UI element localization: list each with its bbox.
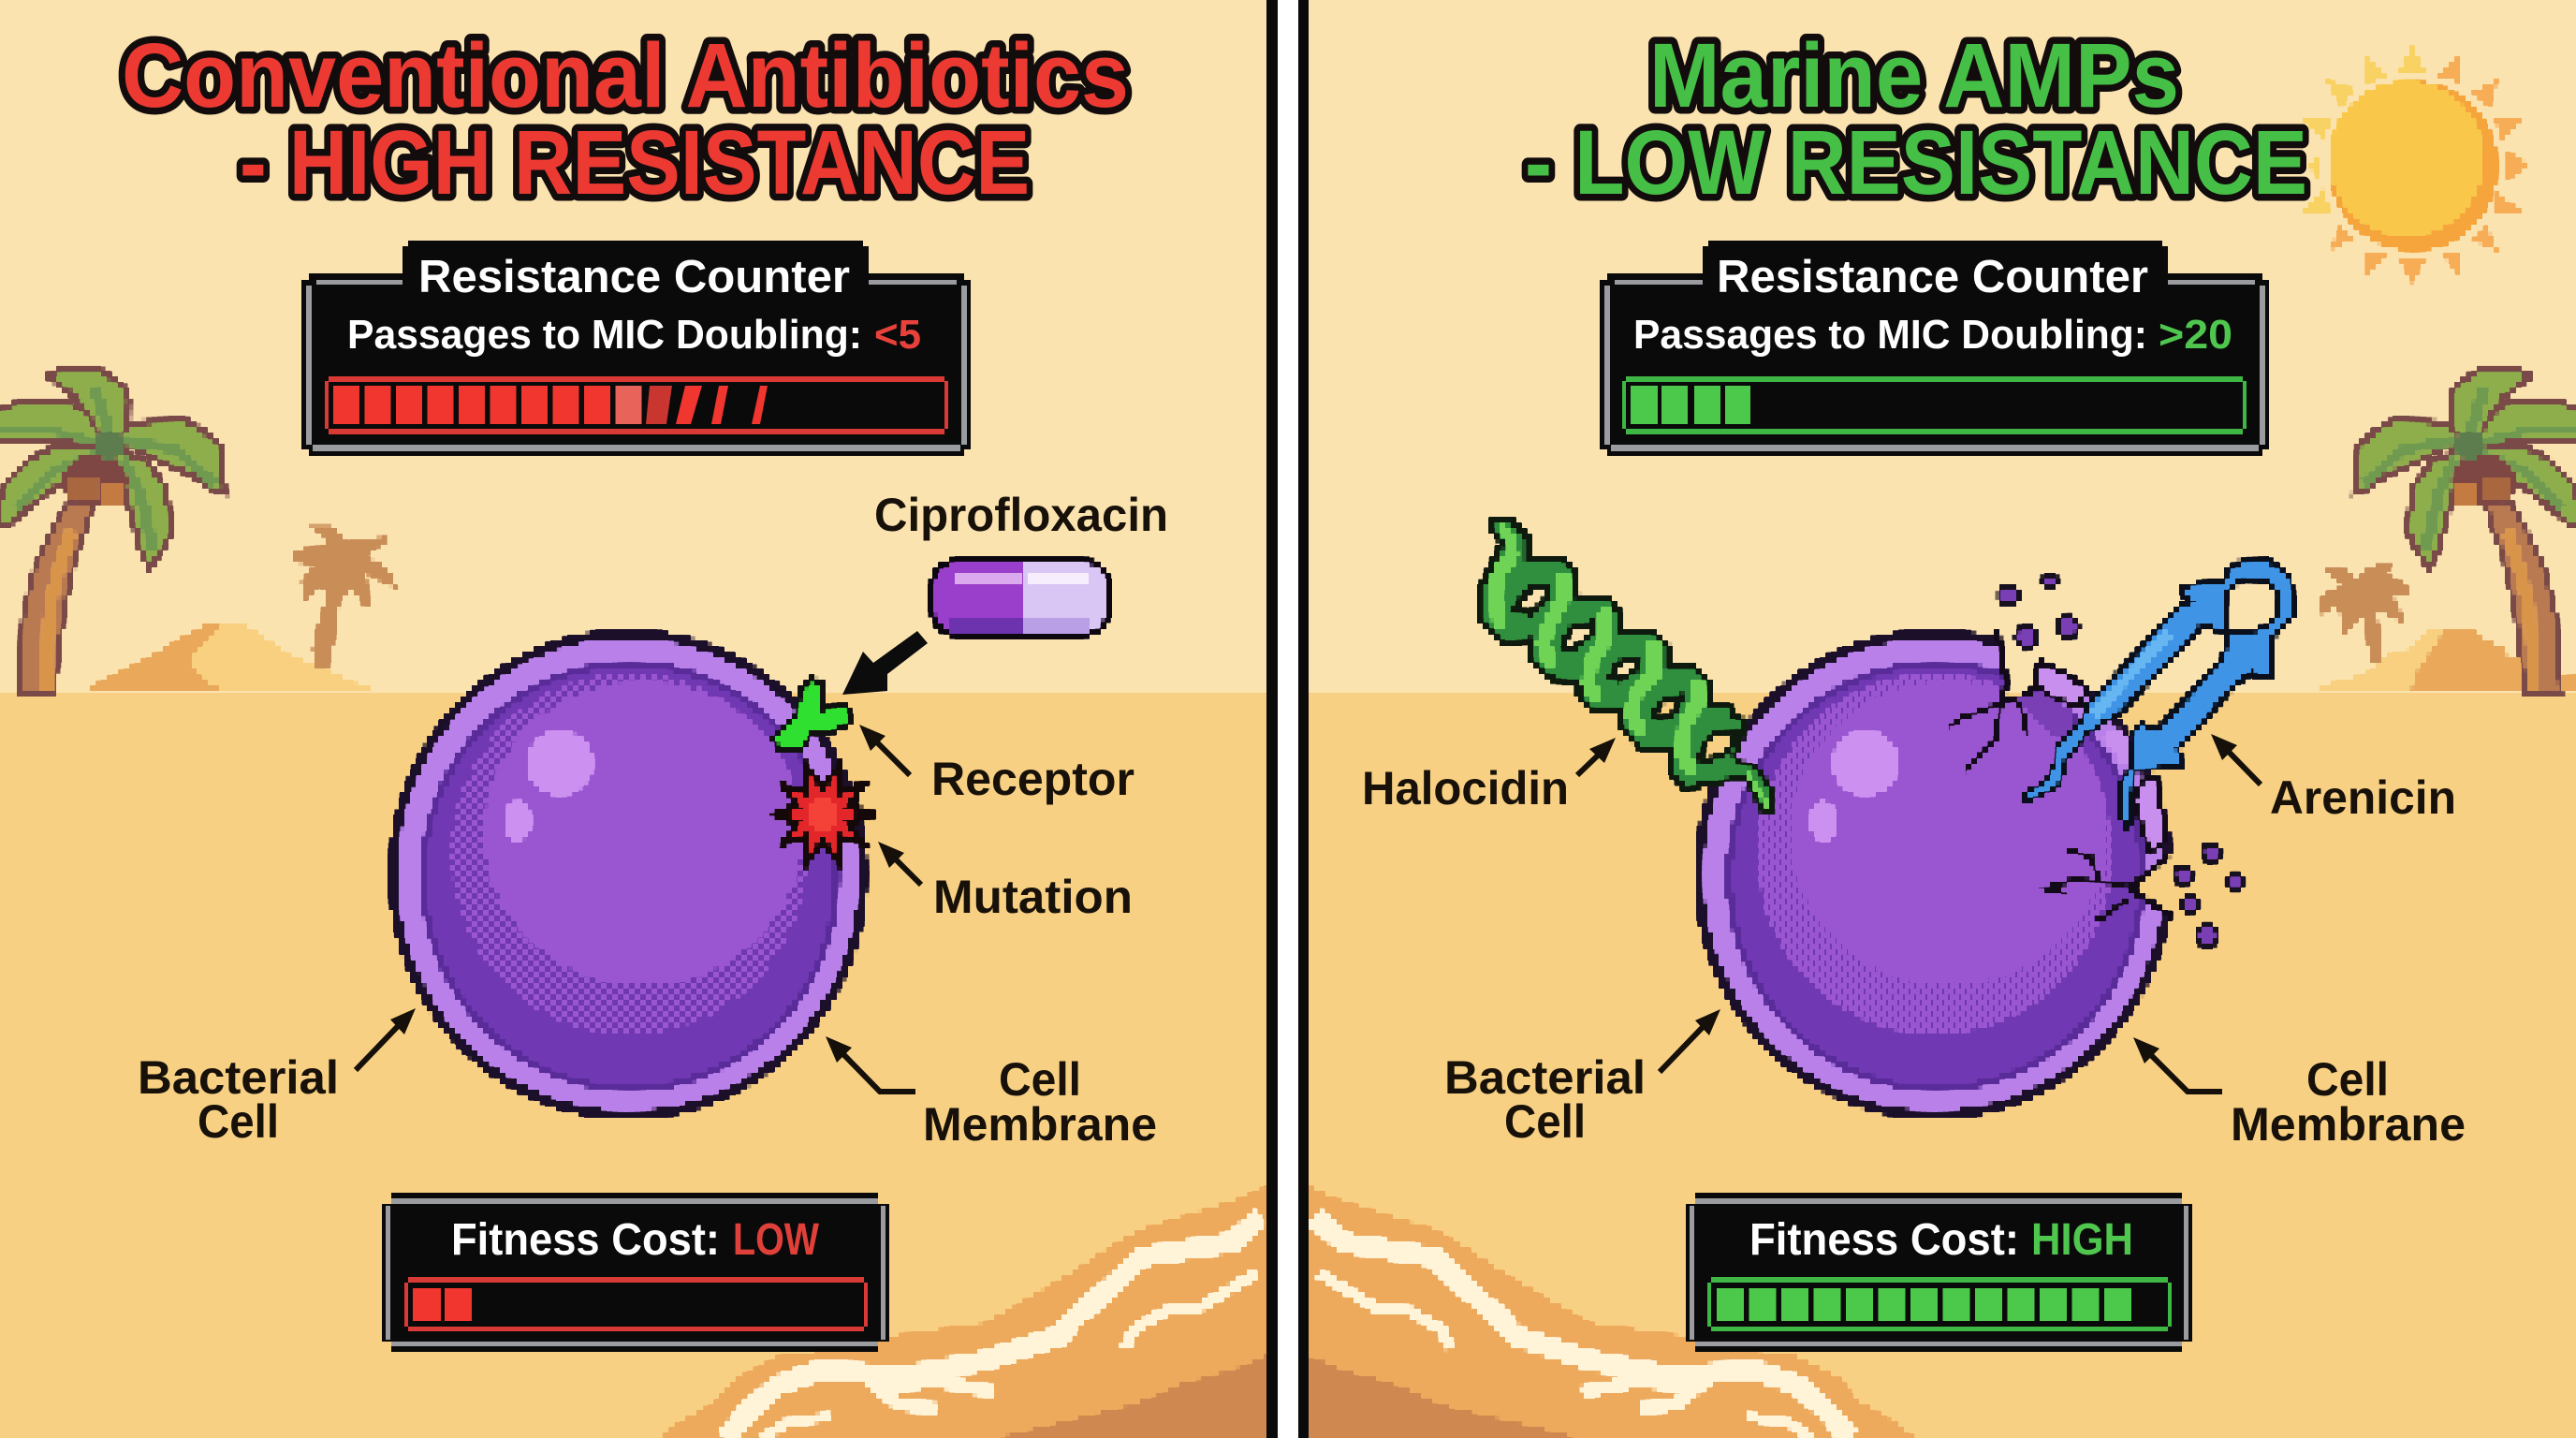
cell diagram: receptor mutation	[388, 558, 1111, 1120]
icon: membrane fragments	[2019, 665, 2167, 852]
arrow: cell membrane	[2133, 1037, 2222, 1092]
arrow: mutation	[878, 842, 921, 885]
icon: distant dune	[91, 622, 372, 693]
cell diagram: membrane rupture	[1482, 521, 2295, 1120]
icon: palm tree	[0, 371, 225, 692]
label: bacterial cell: Bacterial	[1444, 1051, 1646, 1104]
arrow: bacterial cell	[356, 1008, 416, 1070]
icon: debris fragments	[1999, 574, 2242, 946]
title: marine AMPs	[1525, 24, 2307, 213]
icon: distant palm	[2318, 565, 2408, 665]
label: cell membrane	[923, 1053, 1157, 1151]
label: bacterial cell	[138, 1051, 339, 1148]
desert background	[0, 0, 1267, 1438]
arrow: bacterial cell	[1660, 1009, 1720, 1072]
panel: conventional antibiotics	[0, 0, 1267, 1438]
icon: mutation star	[774, 768, 871, 861]
arrow: halocidin	[1577, 738, 1616, 775]
label: mutation: Mutation	[933, 871, 1133, 923]
label: cell membrane	[2231, 1053, 2466, 1151]
desert scenery	[0, 371, 1267, 1438]
value: less than 5: <5	[874, 312, 921, 358]
icon: membrane cracks	[1947, 700, 2127, 921]
panel: resistance counter low	[1600, 241, 2269, 456]
panel: fitness cost high	[1686, 1193, 2192, 1352]
label: cell membrane: Membrane	[2231, 1098, 2466, 1151]
label: halocidin: Halocidin	[1362, 762, 1569, 814]
heading: resistance counter: Resistance Counter	[418, 252, 850, 302]
label: cell membrane: Cell	[2306, 1053, 2389, 1106]
panel: fitness cost low	[382, 1193, 889, 1352]
text: fitness cost: Fitness Cost:	[451, 1215, 720, 1265]
title: conventional antibiotics	[122, 24, 1129, 213]
title: conventional antibiotics: Conventional Antibiotics	[122, 24, 1129, 126]
label: bacterial cell	[1444, 1051, 1646, 1148]
icon: arenicin hairpin	[2025, 560, 2295, 830]
progress bar: low	[404, 1277, 868, 1331]
text: passages to MIC doubling: Passages to MIC Doubling:	[1633, 312, 2147, 358]
icon: ruptured bacterial cell	[1694, 629, 2174, 1120]
value: greater than 20: >20	[2159, 312, 2232, 358]
icon: halocidin helix	[1482, 521, 1772, 813]
arrow: receptor	[859, 725, 910, 775]
icon: bacterial cell	[388, 629, 868, 1120]
desert background	[1309, 0, 2576, 1438]
label: bacterial cell: Cell	[1504, 1095, 1586, 1148]
arrow: cell membrane	[826, 1036, 915, 1092]
label: cell membrane: Membrane	[923, 1098, 1157, 1151]
icon: sun	[2303, 46, 2529, 284]
label: ciprofloxacin: Ciprofloxacin	[874, 489, 1168, 541]
icon: distant dune	[2319, 627, 2576, 693]
panel: marine AMPs	[1308, 0, 2576, 1438]
arrow: arenicin	[2211, 734, 2261, 785]
heading: resistance counter: Resistance Counter	[1717, 252, 2148, 302]
title: marine AMPs: - LOW RESISTANCE	[1525, 111, 2307, 213]
icon: ciprofloxacin pill	[929, 558, 1111, 638]
icon: receptor	[772, 679, 850, 752]
text: fitness cost: Fitness Cost:	[1749, 1215, 2019, 1265]
title: marine AMPs: Marine AMPs	[1649, 24, 2179, 126]
text: passages to MIC doubling: Passages to MIC Doubling:	[347, 312, 862, 358]
icon: palm tree	[2354, 371, 2576, 692]
label: arenicin: Arenicin	[2270, 771, 2456, 824]
value: high: HIGH	[2031, 1215, 2133, 1265]
arrow: pill to receptor	[842, 631, 928, 695]
panel: resistance counter high	[301, 241, 971, 456]
label: receptor: Receptor	[931, 753, 1134, 805]
label: bacterial cell: Cell	[198, 1095, 279, 1148]
icon: sand swirl	[1308, 1187, 1915, 1438]
desert scenery	[1308, 46, 2576, 1438]
value: low: LOW	[733, 1215, 820, 1265]
progress bar: high resistance	[325, 376, 948, 434]
icon: distant palm	[295, 526, 396, 670]
icon: sand swirl	[660, 1187, 1267, 1438]
progress bar: high	[1707, 1277, 2172, 1331]
label: bacterial cell: Bacterial	[138, 1051, 339, 1104]
title: conventional antibiotics: - HIGH RESISTANCE	[240, 111, 1030, 213]
progress bar: low resistance	[1622, 376, 2247, 434]
label: cell membrane: Cell	[999, 1053, 1081, 1106]
